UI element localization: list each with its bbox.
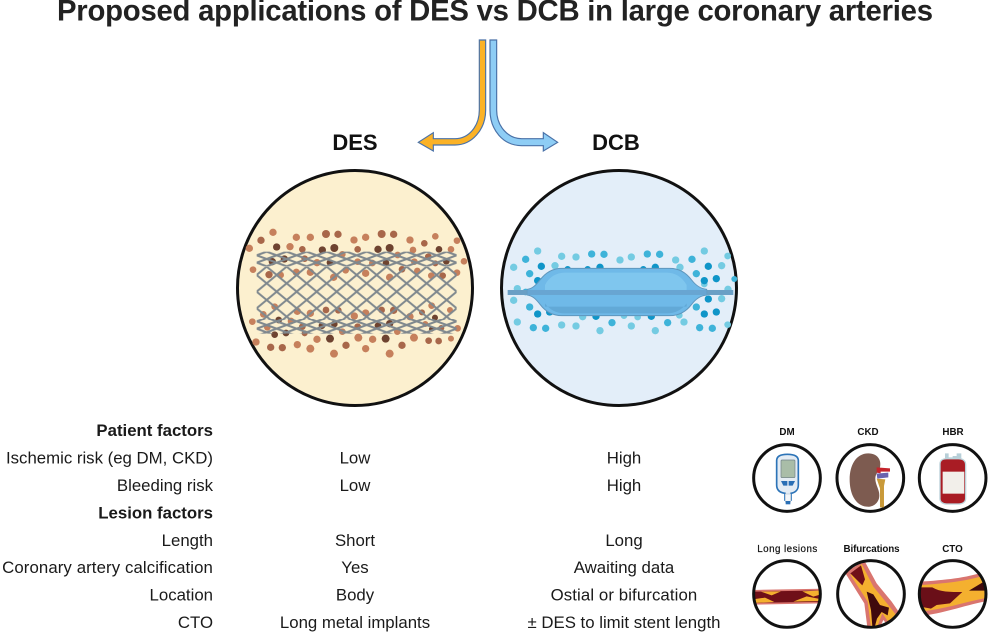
row: CTO: CTO	[178, 613, 213, 632]
icon: bifurcation vessel	[838, 561, 904, 630]
icon: kidney	[837, 445, 904, 511]
arrow: to DCB	[490, 40, 558, 151]
row: CTO	[178, 613, 720, 632]
catheter	[508, 290, 733, 295]
icon labels: CTO	[942, 544, 963, 555]
row: length: Short	[335, 531, 375, 550]
circle background	[502, 170, 736, 406]
icon: glucose meter	[754, 445, 820, 511]
particles behind stent	[246, 229, 467, 358]
row: bleeding risk: Bleeding risk	[117, 476, 214, 495]
row: location: Ostial or bifurcation	[551, 586, 697, 604]
panel: DCB circle with balloon	[502, 170, 737, 406]
table: patient and lesion factors	[2, 421, 720, 632]
panel: DES circle with stent	[238, 170, 472, 406]
row: calcification	[2, 558, 675, 577]
row: ischemic risk	[6, 448, 641, 468]
icon: blood bag	[919, 445, 986, 511]
balloon	[527, 268, 707, 316]
row: length	[162, 531, 643, 550]
heading: DES: DES	[332, 130, 378, 155]
row: calcification: Coronary artery calcification	[2, 558, 213, 577]
row: location: Location	[150, 586, 213, 604]
row: ischemic risk: Ischemic risk (eg DM, CKD)	[6, 448, 213, 468]
arrows: DES and DCB split	[418, 40, 558, 151]
icon: long lesions vessel	[752, 561, 825, 627]
row: ischemic risk: Low	[340, 448, 371, 468]
circle background	[238, 170, 472, 406]
icon: CTO vessel	[917, 561, 990, 627]
balloon highlights	[545, 273, 687, 290]
row: location	[150, 586, 697, 604]
row: bleeding risk: High	[607, 476, 641, 495]
heading: DCB: DCB	[592, 130, 640, 155]
row: CTO: Long metal implants	[280, 613, 430, 632]
icon labels	[757, 427, 964, 555]
row: CTO: ± DES to limit stent length	[528, 613, 720, 632]
icon labels: Long lesions	[757, 544, 818, 555]
row: calcification: Awaiting data	[574, 558, 675, 577]
stent lattice	[257, 252, 457, 334]
row: length: Length	[162, 531, 213, 550]
row: bleeding risk	[117, 476, 641, 495]
icon labels: CKD	[857, 427, 879, 438]
row: bleeding risk: Low	[340, 476, 371, 495]
row: location: Body	[336, 586, 375, 604]
row: length: Long	[605, 531, 643, 550]
row: patient factors heading: Patient factors	[96, 421, 213, 440]
drug particles	[510, 247, 732, 334]
arrow: to DES	[418, 40, 486, 151]
row: lesion factors heading: Lesion factors	[98, 504, 213, 522]
row: ischemic risk: High	[607, 448, 641, 468]
icon labels: Bifurcations	[844, 544, 900, 555]
icon labels: HBR	[942, 427, 964, 438]
icon labels: DM	[779, 427, 795, 438]
row: calcification: Yes	[341, 558, 369, 577]
